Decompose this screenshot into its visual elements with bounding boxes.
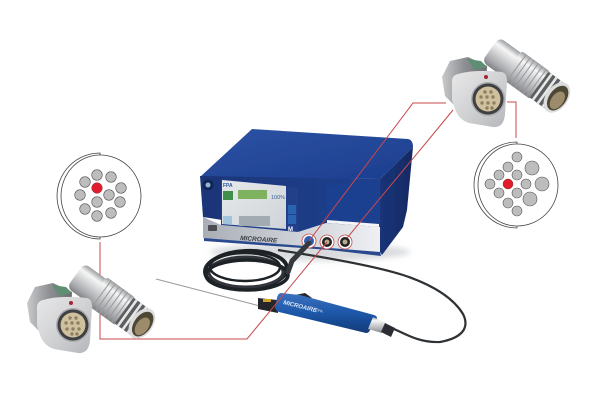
handpiece neck <box>368 317 386 333</box>
unit top <box>200 129 413 179</box>
touch screen: 100% <box>271 195 285 201</box>
touch screen <box>221 179 298 233</box>
handpiece switch <box>290 293 312 298</box>
cable to handpiece <box>278 250 465 342</box>
control unit <box>200 129 413 261</box>
power button <box>202 180 214 190</box>
pin diagram: left <box>57 153 141 239</box>
cable coil <box>204 249 288 291</box>
handpiece <box>258 293 395 337</box>
connector icon <box>208 225 217 231</box>
handpiece label: MICROAIRE <box>283 300 318 314</box>
needle <box>156 279 260 306</box>
silver strip <box>203 217 380 252</box>
unit front <box>200 176 380 232</box>
handpiece body <box>275 293 377 333</box>
red connection lines <box>100 102 516 339</box>
main artwork <box>27 36 576 353</box>
touch screen: FPA <box>223 183 233 189</box>
unit slit <box>327 220 379 227</box>
unit side <box>380 147 413 255</box>
pin diagram: right <box>474 142 558 228</box>
ports <box>302 234 352 249</box>
cable plug <box>288 243 309 272</box>
handpiece tip <box>258 298 278 313</box>
connector: upper right <box>442 36 576 127</box>
touch screen: M <box>288 227 293 233</box>
unit shadow <box>210 243 410 261</box>
connector: lower left <box>27 262 161 353</box>
handpiece: EPA <box>315 307 324 314</box>
brand logo: MICROAIRE <box>240 235 278 245</box>
